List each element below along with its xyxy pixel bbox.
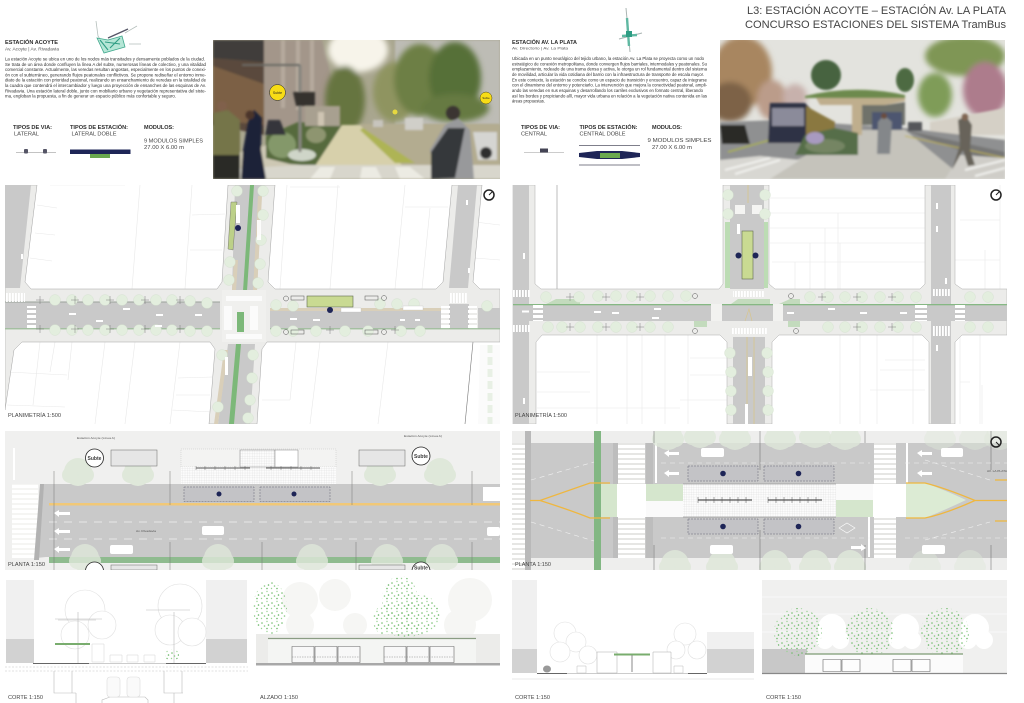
section: corte La Plata bbox=[512, 580, 754, 701]
section: alzado Acoyte bbox=[253, 576, 500, 701]
icon: subte sign bbox=[270, 84, 492, 114]
tipos de via: CENTRAL bbox=[521, 132, 547, 138]
heading: ESTACIÓN AV. LA PLATA bbox=[512, 38, 577, 46]
station module bbox=[736, 231, 758, 279]
cars bbox=[21, 200, 470, 327]
text block: ón con el subterráneo, generando flujos peatonales conflictivos. Se propone rediseñar el entorno inme- bbox=[5, 72, 207, 77]
modulos bbox=[648, 125, 712, 151]
label: PLANIMETRÍA 1:500 bbox=[515, 412, 567, 419]
title bbox=[745, 4, 1006, 31]
icon: subte sign: Subte bbox=[273, 91, 282, 95]
section: corte Acoyte bbox=[5, 580, 248, 703]
modulos: MODULOS: bbox=[144, 125, 174, 131]
text block: comercial constante. Actualmente, las veredas resultan angostas, especialmente en los puntos de conexi- bbox=[5, 67, 207, 72]
text block: La estación Acoyte se ubica en uno de los nodos más transitados y densamente poblados de la ciudad. bbox=[5, 56, 205, 62]
modulos: 9 MODULOS SIMPLES bbox=[144, 138, 204, 144]
road bbox=[512, 431, 1007, 570]
label: CORTE 1:150 bbox=[766, 695, 801, 701]
tipos de via: TIPOS DE VIA: bbox=[521, 125, 560, 131]
text block: emplazamiento, rodeado de una trama densa y activa, le otorga un rol fundamental dentro del sistema bbox=[512, 67, 708, 72]
panel: planimetría La Plata bbox=[512, 185, 1007, 424]
icon: locator map La Plata bbox=[619, 8, 642, 52]
panel: planimetría Acoyte bbox=[5, 185, 500, 424]
planted roof bbox=[55, 643, 90, 645]
text block: Ubicada en un punto neurálgico del tejido urbano, la estación Av. La Plata se proyecta como un nodo bbox=[512, 56, 705, 61]
station names: Estación Acoyte (Línea A) bbox=[404, 434, 442, 438]
text block: ma, engloban la propuesta, a fin de generar un espacio público más confortable y seguro. bbox=[5, 94, 176, 99]
text block: diato de la estación con prioridad peatonal, realizando un ensanchamiento de veredas en la totalidad de bbox=[5, 78, 207, 83]
modulos: MODULOS: bbox=[652, 125, 682, 131]
icon: north bbox=[484, 190, 494, 200]
tipos de estación: LATERAL DOBLE bbox=[72, 132, 117, 138]
planted roof bbox=[614, 654, 650, 656]
cars bbox=[522, 203, 947, 404]
text block: Rivadavia. Una estación lateral doble, junto con mobiliario urbano y vegetación representativa del siste- bbox=[5, 88, 207, 93]
lot lines bbox=[537, 185, 1000, 424]
trees bbox=[652, 420, 1016, 578]
trees bbox=[62, 458, 458, 572]
icon: subte: Subte bbox=[88, 456, 102, 462]
panel: estación Av. La Plata info bbox=[512, 8, 712, 165]
modulos: 27.00 X 6.00 m bbox=[652, 145, 692, 151]
text block: de movilidad, articular la vida cotidiana del barrio con la infraestructura de transporte de escala mayor. bbox=[512, 72, 704, 77]
lot lines bbox=[7, 185, 500, 424]
arrows and cars bbox=[54, 487, 500, 554]
road bbox=[5, 448, 500, 570]
modulos bbox=[144, 125, 204, 151]
trees bbox=[541, 190, 993, 415]
street name: AV. LA PLATA bbox=[987, 469, 1007, 473]
label: ALZADO 1:150 bbox=[260, 695, 298, 701]
text block: estratégico de conexión metropolitana, donde convergen flujos barriales, intermodales y peatonales. Su bbox=[512, 61, 708, 66]
text block: ando las veredas en sus esquinas y desarrollando los carriles exclusivos en formato central, liberando bbox=[512, 88, 704, 93]
arrows and cars bbox=[664, 448, 963, 554]
text block: así los bordes y propiciando allí, mayor vida urbana en relación a la vegetación nativa contenida en las bbox=[512, 93, 707, 98]
tipos de estación: TIPOS DE ESTACIÓN: bbox=[70, 123, 128, 131]
photo: render estación La Plata bbox=[720, 40, 1005, 179]
station platform bbox=[181, 449, 336, 484]
station names bbox=[77, 434, 442, 533]
heading: ESTACIÓN ACOYTE bbox=[5, 38, 58, 46]
text block: Se trata de un área donde confluyen la línea A del subte, numerosas líneas de colectivo, y una vitalidad bbox=[5, 62, 207, 67]
title: CONCURSO ESTACIONES DEL SISTEMA TramBus bbox=[745, 19, 1006, 31]
stairs bbox=[111, 450, 405, 570]
icon: north bbox=[991, 437, 1001, 447]
text block bbox=[512, 56, 708, 104]
title: L3: ESTACIÓN ACOYTE – ESTACIÓN Av. LA PLATA bbox=[747, 4, 1006, 17]
subte markers bbox=[692, 294, 798, 334]
tipos de via: TIPOS DE VIA: bbox=[13, 125, 52, 131]
label: PLANTA 1:150 bbox=[515, 562, 551, 568]
section: corte La Plata elevation bbox=[762, 580, 1007, 701]
bus bays bbox=[184, 487, 330, 502]
label: CORTE 1:150 bbox=[515, 695, 550, 701]
modulos: 27.00 X 6.00 m bbox=[144, 145, 184, 151]
text block: En este contexto, la estación se concibe como un espacio de transición y encuentro, capaz de integrarse bbox=[512, 77, 708, 82]
text block bbox=[5, 56, 207, 99]
tipos de via bbox=[13, 125, 56, 154]
icon: north bbox=[991, 190, 1001, 200]
station names: Estación Acoyte (Línea A) bbox=[77, 436, 115, 440]
tipos de via: LATERAL bbox=[14, 132, 39, 138]
icon: subte: Subte bbox=[414, 566, 428, 572]
yellow lanes bbox=[530, 480, 1007, 521]
label: CORTE 1:150 bbox=[8, 695, 43, 701]
subheading: Av. Acoyte | Av. Rivadavia bbox=[5, 46, 60, 52]
icon: subte: Subte bbox=[414, 454, 428, 460]
panel: planta La Plata bbox=[512, 431, 1007, 570]
tipos de via bbox=[521, 125, 564, 152]
subte markers bbox=[284, 296, 386, 334]
tipos de estación bbox=[579, 123, 640, 165]
modulos: 9 MODULOS SIMPLES bbox=[648, 138, 712, 144]
text block: áreas propuestas. bbox=[512, 99, 545, 104]
panel: planta Acoyte bbox=[5, 431, 500, 572]
tipos de estación: CENTRAL DOBLE bbox=[580, 132, 626, 138]
label: PLANIMETRÍA 1:500 bbox=[8, 412, 61, 419]
station module bbox=[225, 202, 423, 375]
icon: subte bbox=[86, 447, 430, 580]
tipos de estación: TIPOS DE ESTACIÓN: bbox=[580, 123, 638, 131]
bus bays bbox=[688, 466, 834, 534]
text block: con el dinamismo del entorno y potenciarlo. La intervención que mejora la conectividad peatonal, ampli- bbox=[512, 83, 708, 88]
panel: estación Acoyte info bbox=[5, 21, 207, 158]
tipos de estación bbox=[70, 123, 130, 158]
streets bbox=[5, 185, 500, 424]
station names: Av. Rivadavia bbox=[136, 529, 157, 533]
trees bbox=[36, 186, 492, 423]
icon: subte sign: Subte bbox=[482, 96, 490, 100]
label: PLANTA 1:150 bbox=[8, 562, 45, 568]
photo: render estación Acoyte bbox=[213, 40, 500, 179]
central platform bbox=[601, 483, 966, 518]
subheading: Av. Directorio | Av. La Plata bbox=[512, 46, 569, 50]
streets bbox=[513, 185, 1007, 424]
icon: locator map Acoyte bbox=[96, 21, 141, 53]
text block: la cuadra que contendrá el intercambiador y luego una proyección de ensanches de las esquinas de Av. bbox=[5, 83, 206, 88]
